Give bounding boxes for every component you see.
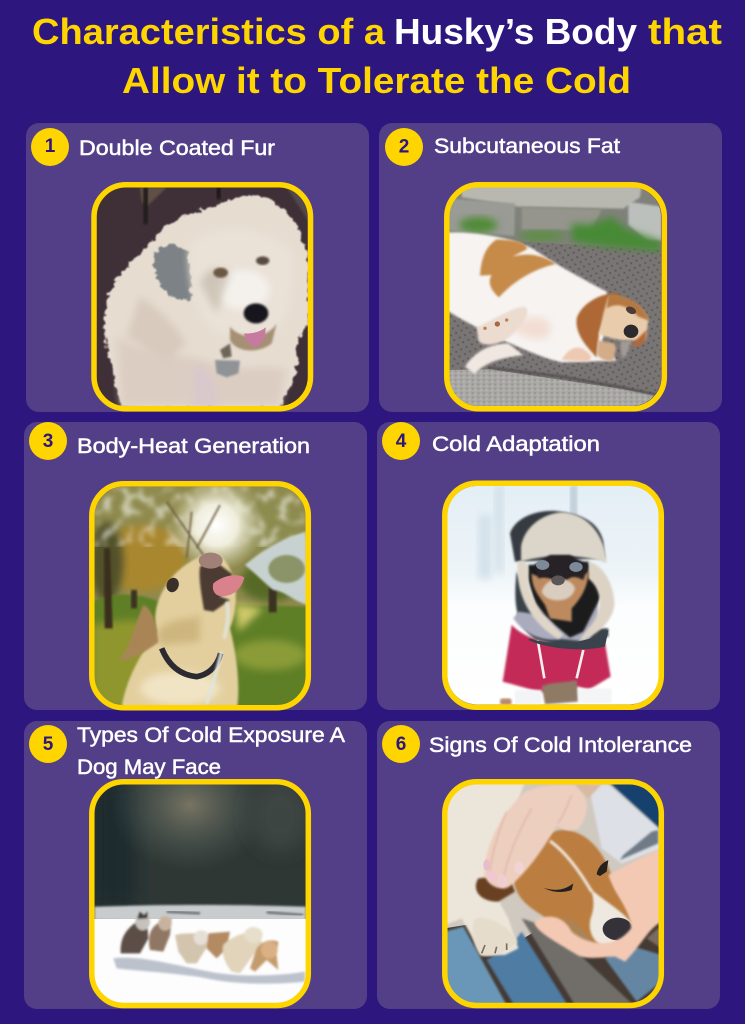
- title: Characteristics of a: [32, 11, 386, 52]
- panel: subcutaneous fat: [379, 123, 722, 412]
- number badge 3: [29, 422, 67, 460]
- photo: overweight basset hound on a mat: [447, 185, 663, 408]
- number badge 4: 4: [396, 431, 407, 452]
- number badge 2: 2: [399, 136, 409, 158]
- number badge 1: [31, 128, 69, 166]
- heading: types of cold exposure: Dog May Face: [77, 756, 221, 779]
- hood outer: [515, 572, 608, 647]
- photo frame 3: [92, 484, 308, 708]
- photo: hands comforting a resting dog: [445, 782, 662, 1007]
- title: [32, 11, 722, 101]
- number badge 5: [29, 725, 67, 763]
- number badge 6: [382, 725, 420, 763]
- heading: body-heat generation: Body-Heat Generation: [77, 435, 310, 458]
- photo: fluffy white dog: [93, 184, 313, 411]
- number badge 1: 1: [45, 136, 56, 157]
- upper hand: [484, 785, 587, 889]
- photo frame 1: [94, 185, 310, 409]
- panel: body-heat generation: [24, 422, 367, 710]
- photo: dog drinking water in a park: [90, 478, 308, 708]
- heading: double coated fur: Double Coated Fur: [79, 137, 275, 160]
- coat: [503, 625, 611, 692]
- face: [532, 572, 588, 622]
- panel: double coated fur: [26, 123, 369, 412]
- photo frame 6: [445, 782, 661, 1006]
- photo frame 2: [447, 185, 664, 409]
- inner hood: [527, 562, 602, 638]
- photo: sled dogs running on snow: [94, 784, 306, 1003]
- lower hand: [534, 848, 662, 962]
- panel: signs of cold intolerance: [377, 721, 720, 1009]
- number badge 2: [385, 128, 423, 166]
- heading: types of cold exposure: Types Of Cold Exposure A: [77, 724, 345, 747]
- photo frame 5: [92, 782, 308, 1006]
- number badge 6: 6: [396, 734, 406, 755]
- heading: types of cold exposure: [77, 724, 345, 779]
- heading: subcutaneous fat: Subcutaneous Fat: [434, 135, 620, 158]
- number badge 3: 3: [43, 431, 53, 452]
- panel: types of cold exposure: [24, 721, 367, 1009]
- heading: signs of cold intolerance: Signs Of Cold Intolerance: [429, 734, 692, 757]
- title: Husky’s Body: [394, 11, 637, 52]
- title: that: [648, 11, 722, 52]
- number badge 4: [382, 422, 420, 460]
- hood fleece: [517, 561, 563, 639]
- photo frame 4: [445, 483, 661, 707]
- photo: small dog in hat and red coat: [445, 483, 662, 707]
- number badge 5: 5: [43, 734, 54, 755]
- panel: cold adaptation: [377, 422, 720, 710]
- heading: cold adaptation: Cold Adaptation: [432, 433, 600, 456]
- head: [513, 830, 632, 947]
- title: Allow it to Tolerate the Cold: [122, 60, 631, 101]
- hat flaps: [510, 511, 605, 562]
